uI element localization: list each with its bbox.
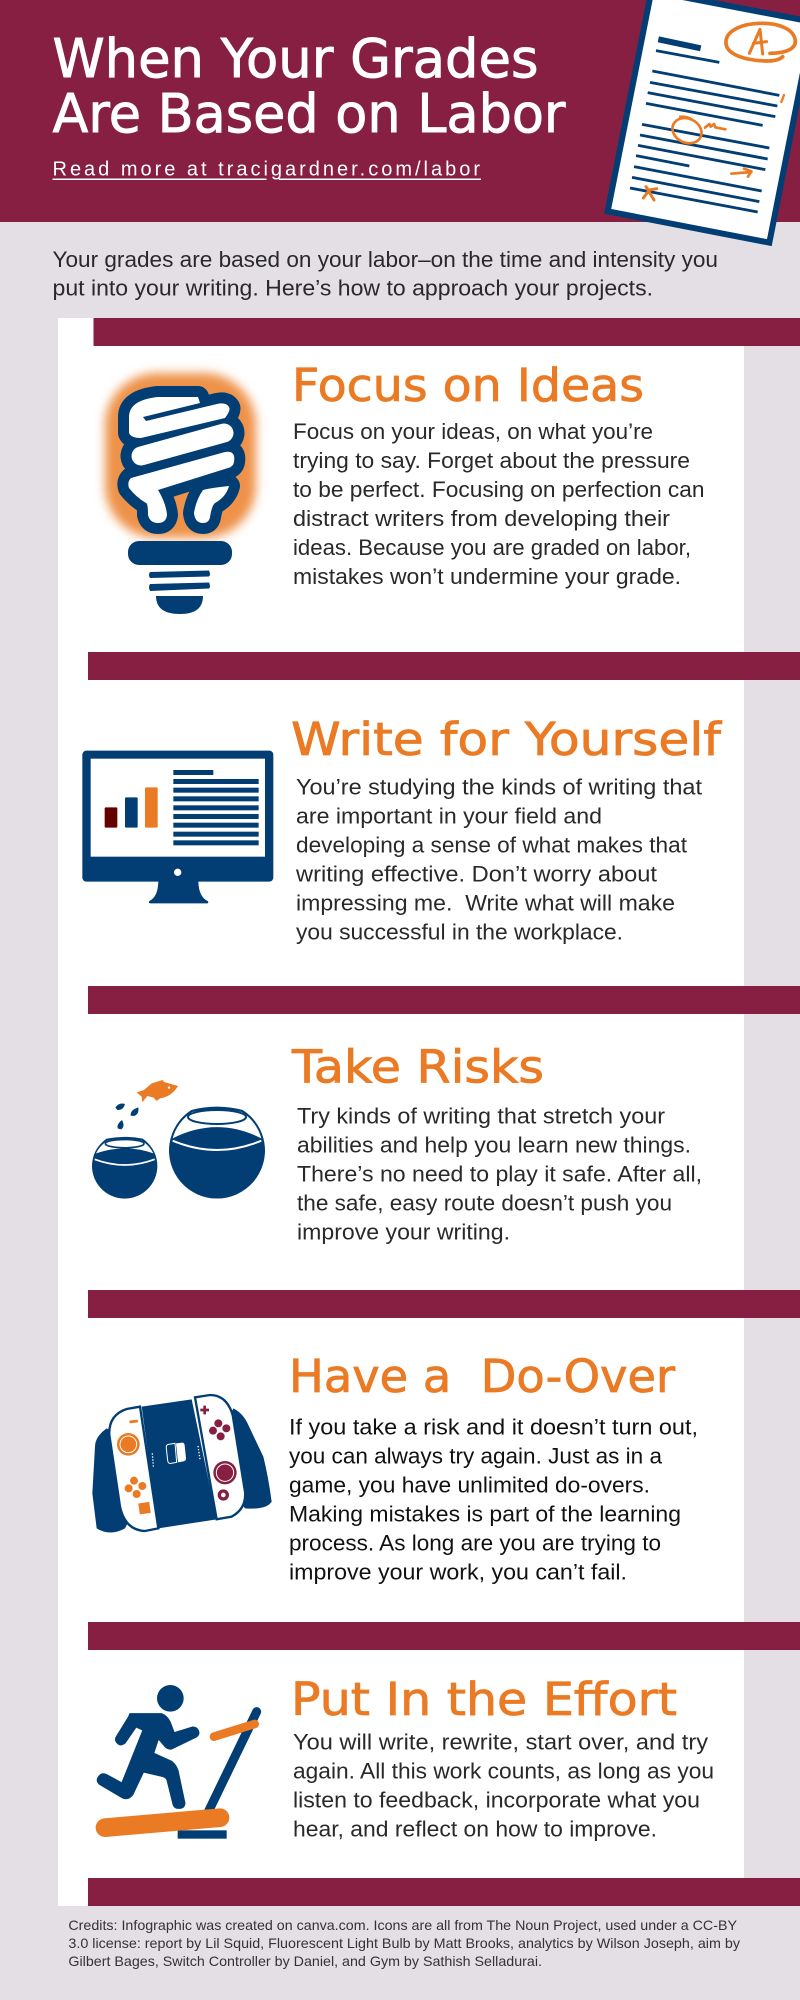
text block	[293, 1729, 714, 1841]
text block: to be perfect. Focusing on perfection can	[293, 477, 704, 502]
text block: distract writers from developing their	[293, 506, 670, 531]
text block: If you take a risk and it doesn’t turn out,	[289, 1414, 698, 1439]
fish	[137, 1080, 178, 1102]
text block: writing effective. Don’t worry about	[295, 861, 657, 886]
text block: again. All this work counts, as long as you	[293, 1758, 714, 1783]
icon: runner on treadmill	[98, 1685, 257, 1839]
credits: Gilbert Bages, Switch Controller by Daniel, and Gym by Sathish Selladurai.	[68, 1953, 542, 1969]
heading: Have a Do-Over	[289, 1350, 676, 1403]
text block	[289, 1414, 698, 1584]
panel: have a do-over	[92, 1350, 698, 1584]
heading: Put In the Effort	[291, 1673, 677, 1726]
icon: graded report	[608, 0, 800, 243]
text block	[293, 419, 704, 589]
maroon divider bars	[88, 318, 800, 1906]
text block: process. As long are you are trying to	[289, 1530, 661, 1555]
text block: Try kinds of writing that stretch your	[297, 1103, 665, 1128]
credits: Credits: Infographic was created on canva.com. Icons are all from The Noun Project, used under a CC-BY	[68, 1917, 738, 1933]
icon: game controller	[92, 1395, 272, 1532]
text block: are important in your field and	[296, 803, 602, 828]
text block: mistakes won’t undermine your grade.	[293, 564, 681, 589]
text block: You will write, rewrite, start over, and try	[293, 1729, 708, 1754]
water drops	[115, 1103, 138, 1129]
heading: Take Risks	[291, 1041, 544, 1094]
heading: Write for Yourself	[291, 713, 722, 766]
text block	[297, 1103, 702, 1244]
text block: hear, and reflect on how to improve.	[293, 1816, 657, 1841]
text block: improve your work, you can’t fail.	[289, 1559, 627, 1584]
text block: game, you have unlimited do-overs.	[289, 1472, 650, 1497]
header banner	[0, 0, 800, 243]
text block: abilities and help you learn new things.	[297, 1132, 691, 1157]
text block: listen to feedback, incorporate what you	[293, 1787, 700, 1812]
text block: the safe, easy route doesn’t push you	[297, 1190, 672, 1215]
title: Are Based on Labor	[52, 82, 566, 145]
text block: developing a sense of what makes that	[296, 832, 687, 857]
text block: ideas. Because you are graded on labor,	[293, 535, 691, 560]
small bowl	[92, 1137, 157, 1199]
text block: There’s no need to play it safe. After all,	[297, 1161, 702, 1186]
text block: you successful in the workplace.	[296, 919, 623, 944]
panel: focus on ideas	[105, 359, 704, 614]
text block: trying to say. Forget about the pressure	[293, 448, 690, 473]
white content panel	[58, 318, 744, 1906]
credits: 3.0 license: report by Lil Squid, Fluorescent Light Bulb by Matt Brooks, analytics by Wilson Joseph, aim by	[68, 1935, 740, 1951]
text block: Focus on your ideas, on what you’re	[293, 419, 653, 444]
icon: fish jumping between bowls	[92, 1080, 265, 1199]
icon: light bulb	[105, 373, 256, 614]
intro text: put into your writing. Here’s how to approach your projects.	[52, 276, 653, 300]
panel: write for yourself	[82, 713, 722, 944]
text block: improve your writing.	[297, 1219, 510, 1244]
large bowl	[169, 1107, 265, 1199]
title	[52, 27, 566, 145]
text block	[295, 774, 702, 944]
panel: take risks	[92, 1041, 702, 1244]
text block: impressing me. Write what will make	[296, 890, 675, 915]
link: Read more at tracigardner.com/labor	[52, 158, 480, 180]
credits	[68, 1917, 740, 1969]
intro text	[52, 247, 718, 300]
text block: you can always try again. Just as in a	[289, 1443, 663, 1468]
icon: monitor analytics	[82, 751, 273, 903]
intro text: Your grades are based on your labor–on the time and intensity you	[52, 247, 718, 272]
heading: Focus on Ideas	[292, 359, 644, 412]
text block: Making mistakes is part of the learning	[289, 1501, 681, 1526]
text block: You’re studying the kinds of writing that	[296, 774, 702, 799]
title: When Your Grades	[52, 27, 538, 90]
panel: put in the effort	[98, 1673, 714, 1841]
